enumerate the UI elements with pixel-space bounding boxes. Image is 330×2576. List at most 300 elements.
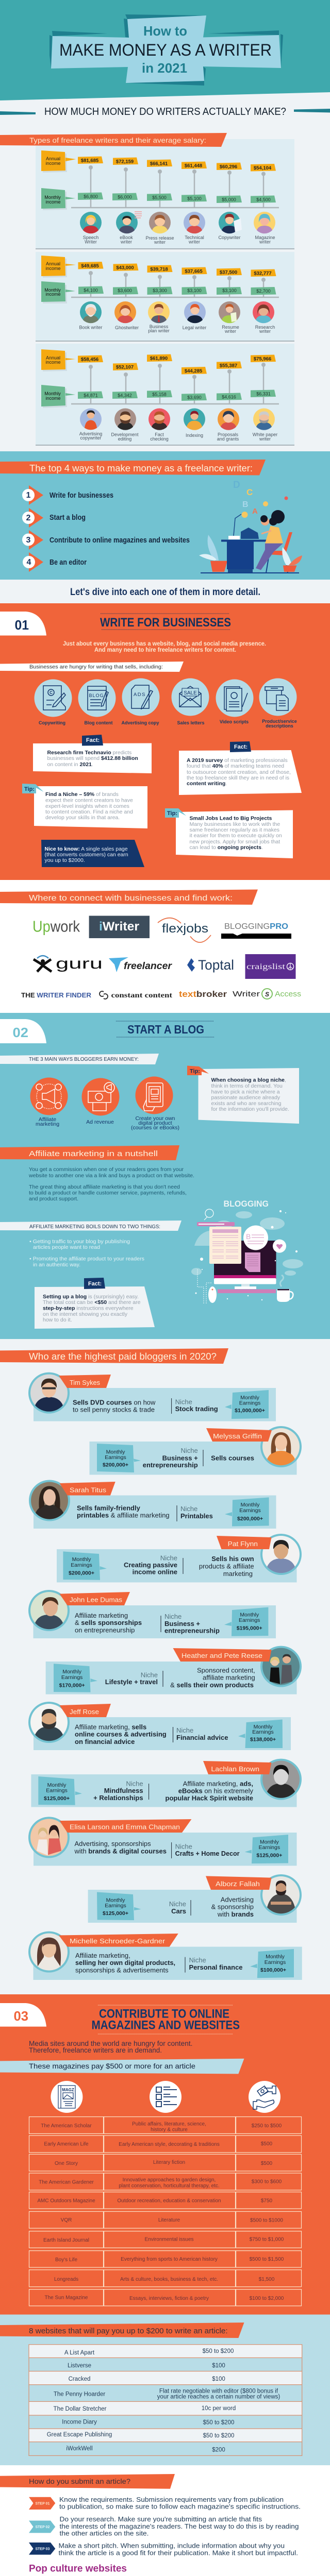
blogger card: Melyssa Griffin: Earnings xyxy=(105,1454,126,1461)
table: websites: iWorkWell xyxy=(66,2446,93,2452)
tip: blog niche: think in terms of demand. You xyxy=(211,1083,283,1089)
writer names row 1: eBook xyxy=(120,235,133,240)
step 1: to publication, so make sure to follow each magazine's specific instructions. xyxy=(59,2503,301,2511)
blogger card: John Lee Dumas: Earnings xyxy=(239,1617,260,1623)
table: magazines xyxy=(29,2117,301,2306)
ribbon: businesses are hungry xyxy=(0,662,184,672)
blogger card: Pat Flynn: products & affiliate xyxy=(199,1563,254,1570)
blogger card: Tim Sykes: Niche xyxy=(175,1398,192,1406)
monthly income key: Monthly xyxy=(44,391,61,396)
blogger card: Michelle Schroeder-Gardner: Monthly xyxy=(266,1954,285,1960)
tip 2: it easier for them to execute quickly on xyxy=(190,833,282,839)
text: affiliate explanation: You get a commission when one of your readers goes from your xyxy=(29,1166,184,1173)
annual income key: income xyxy=(45,360,61,365)
logo: textbroker: textbroker xyxy=(179,989,227,999)
text: affiliate explanation: website to another one via a link and buys a product on that website. xyxy=(28,1173,194,1179)
writer names row 3: copywriter xyxy=(80,435,102,440)
table: magazines: VQR xyxy=(61,2217,72,2223)
blogger card: Alborz Fallah: $125,000+ xyxy=(103,1910,128,1917)
icon: product descriptions xyxy=(259,678,297,716)
writer names row 1: writer xyxy=(154,240,166,245)
logo: constant content xyxy=(100,991,172,999)
icon labels: Sales letters xyxy=(177,720,205,725)
table: websites: A List Apart xyxy=(64,2350,95,2356)
way 3: 3 xyxy=(26,536,31,545)
chart: salaries row 1: $81,685 xyxy=(81,158,99,164)
illustration: woman writing at desk xyxy=(199,480,302,573)
logo: craigslist xyxy=(245,954,296,979)
writer names row 3: Advertising xyxy=(79,431,102,436)
fact 2: the top freelance skill they are in need of is xyxy=(187,775,289,781)
blogger card: Lachlan Brown: $125,000+ xyxy=(44,1795,70,1802)
annual income key: Annual xyxy=(46,261,60,266)
chart: salaries row 1: $60,296 xyxy=(220,164,237,170)
blogger card: Tim Sykes: to sell penny stocks & trade xyxy=(73,1406,155,1414)
logo: writeraccess: S xyxy=(265,991,269,998)
chart: salaries row 1: $5,000 xyxy=(222,197,236,202)
monthly income key xyxy=(41,188,75,210)
blogger card: Heather and Pete Reese: & sells their own products xyxy=(170,1681,254,1689)
blogger card: Lachlan Brown: Earnings xyxy=(46,1788,68,1794)
blogger card: Lachlan Brown: Mindfulness xyxy=(104,1787,143,1794)
blogger card: Elisa Larson and Emma Chapman: Advertising, sponsorships xyxy=(74,1840,151,1848)
icon: digital product xyxy=(135,1077,173,1114)
blogger card: Michelle Schroeder-Gardner: Personal finance xyxy=(189,1963,243,1971)
blogger card: Pat Flynn xyxy=(57,1534,302,1582)
icon: payment hands xyxy=(249,2081,280,2113)
intro text xyxy=(29,2040,193,2054)
blogger card: Pat Flynn: Creating passive xyxy=(124,1561,177,1569)
writer names row 1: writer xyxy=(259,239,271,244)
table: websites: Great Escape Publishing xyxy=(47,2432,112,2438)
way 4: 4 xyxy=(27,558,31,567)
writer names row 3: checking xyxy=(150,436,169,442)
blogger card: Elisa Larson and Emma Chapman: Earnings xyxy=(259,1844,280,1851)
writer names row 3: Development xyxy=(111,432,139,437)
table: magazines: $500 xyxy=(261,2141,273,2147)
blogger card: John Lee Dumas: Affiliate marketing xyxy=(75,1612,128,1619)
ribbon: two things xyxy=(0,1221,182,1231)
tip: blog niche: have to pick a niche where a xyxy=(211,1089,280,1095)
table: magazines: Early American Life xyxy=(44,2142,89,2147)
icon: magazine xyxy=(51,2081,82,2113)
nice to know xyxy=(41,840,144,867)
way 4: Be an editor xyxy=(50,558,87,567)
table: websites: $50 to $200 xyxy=(203,2433,234,2439)
panel: top 4 ways xyxy=(0,451,330,580)
monthly income key: Monthly xyxy=(44,195,61,200)
way 3: Contribute to online magazines and websites xyxy=(50,536,190,545)
chart: salaries row 3: $61,890 xyxy=(150,355,168,362)
annual income key: income xyxy=(45,266,61,271)
writer names row 2: Ghostwriter xyxy=(115,325,139,330)
blogger card: Jeff Rose: on financial advice xyxy=(75,1738,135,1745)
ribbon: how do you submit xyxy=(0,2474,175,2489)
tip 2: Small Jobs Lead to Big Projects xyxy=(190,815,272,821)
tip 2: Many businesses like to work with the xyxy=(190,821,280,827)
text: affiliate explanation: and product support. xyxy=(29,1196,78,1202)
ribbon: 3 main ways: THE 3 MAIN WAYS BLOGGERS EARN MONEY: xyxy=(29,1057,139,1062)
chart: salaries row 1: $4,500 xyxy=(256,197,271,202)
tip 2: same freelancer regularly as it makes xyxy=(190,827,279,833)
blogger card: Heather and Pete Reese: Earnings xyxy=(61,1674,82,1681)
fact 1 xyxy=(33,735,152,773)
tip: blog niche: passionate audience already xyxy=(211,1095,280,1101)
blogger card: Pat Flynn: Sells his own xyxy=(211,1555,254,1563)
tip: blog niche: Tip: xyxy=(190,1069,200,1075)
step 3: Make a short pitch. When submitting, include information about why you xyxy=(59,2541,285,2549)
writer names row 3: and grants xyxy=(217,436,239,442)
blogger card: Tim Sykes: Monthly xyxy=(240,1395,260,1401)
blogger card: Melyssa Griffin: Business + xyxy=(162,1454,198,1462)
logo: writeraccess: Access xyxy=(275,990,301,998)
icon: advertising copy xyxy=(122,678,160,716)
blogger card: Michelle Schroeder-Gardner: $100,000+ xyxy=(260,1967,286,1973)
table: magazines: Everything from sports to American history xyxy=(121,2257,218,2262)
monthly values xyxy=(78,193,276,203)
logo: iWriter: iWriter xyxy=(99,920,139,934)
tip 1: expect their content creators to have xyxy=(45,798,133,804)
blogger card: Melyssa Griffin: entrepreneurship xyxy=(143,1461,198,1469)
fact 2: Fact: xyxy=(234,744,248,750)
intro text: And many need to hire freelance writers for content. xyxy=(94,647,236,653)
chart: salaries row 1: $54,104 xyxy=(254,165,272,171)
tip: blog niche xyxy=(187,1065,299,1124)
way 4 xyxy=(23,552,87,572)
logo: bloggingpro xyxy=(221,922,291,939)
bullets: articles people want to read xyxy=(33,1244,100,1250)
table: magazines: The American Scholar xyxy=(41,2123,92,2129)
writer names row 3: Proposals xyxy=(218,432,239,437)
blogger card: Lachlan Brown: Lachlan Brown xyxy=(211,1765,259,1773)
table: magazines: $1,500 xyxy=(259,2277,275,2282)
section number 02: 02 xyxy=(12,1025,28,1040)
avatars row 3 xyxy=(80,408,275,430)
heading: contribute: CONTRIBUTE TO ONLINE xyxy=(99,2007,229,2021)
intro text xyxy=(63,641,266,653)
ribbon: top 4 ways xyxy=(0,460,266,475)
table: websites: your article reaches a certain number of views) xyxy=(157,2394,280,2400)
blogger card: Heather and Pete Reese xyxy=(46,1646,302,1694)
chart: salaries row 2: $43,000 xyxy=(116,265,134,271)
heading: pop culture websites: Pop culture websites xyxy=(29,2563,127,2574)
icon labels xyxy=(39,719,297,728)
chart: salaries row 2: $37,500 xyxy=(220,270,237,275)
chart: salaries row 3: $4,342 xyxy=(118,393,132,398)
blogger card: Michelle Schroeder-Gardner: Earnings xyxy=(265,1959,286,1965)
table: websites: $50 to $200 xyxy=(203,2420,234,2426)
blogger card: Alborz Fallah xyxy=(88,1874,302,1923)
ribbon: 8 websites: 8 websites that will pay you up to $200 to write an article: xyxy=(29,2327,228,2335)
ribbon: how do you submit: How do you submit an article? xyxy=(29,2478,130,2485)
blogger card: Tim Sykes: Stock trading xyxy=(175,1405,218,1413)
blogger card: John Lee Dumas: John Lee Dumas xyxy=(70,1596,123,1604)
blogger card: Jeff Rose: online courses & advertising xyxy=(75,1731,167,1738)
fact: setting up a blog: step-by-step instructions everywhere xyxy=(43,1306,134,1312)
icon: sales letters: SALE xyxy=(184,690,197,696)
blogger card: Sarah Titus: Sells family-friendly xyxy=(77,1504,141,1512)
chart: salaries row 2: $39,718 xyxy=(150,267,168,272)
writer names row 3: writer xyxy=(259,436,271,442)
monthly income key xyxy=(41,281,75,303)
chart: salaries row 3: $75,966 xyxy=(254,357,271,362)
blogger card: Elisa Larson and Emma Chapman xyxy=(28,1817,297,1866)
tip 2: new projects. Apply for small jobs that xyxy=(190,839,280,845)
blogger card: Heather and Pete Reese: Lifestyle + travel xyxy=(105,1678,158,1686)
table: magazines: history & culture xyxy=(151,2127,188,2132)
blogger card: Pat Flynn: Earnings xyxy=(71,1562,92,1568)
blogger card: Lachlan Brown: Monthly xyxy=(47,1782,67,1788)
blogger card: Elisa Larson and Emma Chapman: Elisa Larson and Emma Chapman xyxy=(70,1823,180,1831)
step 3 xyxy=(29,2541,298,2556)
logo: writeraccess xyxy=(233,989,301,999)
heading: contribute xyxy=(92,2005,240,2034)
annual income key: Annual xyxy=(46,156,60,161)
annual income key: Annual xyxy=(46,355,60,361)
title: How to xyxy=(143,23,187,39)
icon: advertising copy: ADS xyxy=(134,692,146,698)
annual values xyxy=(78,262,276,277)
title xyxy=(59,23,272,76)
chart: salaries row 3: $5,158 xyxy=(152,392,167,397)
logo: craigslist: craigslist xyxy=(246,962,286,971)
chart: salaries row 2: $4,100 xyxy=(84,287,98,293)
fact: setting up a blog: The total cost can be <$50 and there are xyxy=(43,1299,141,1306)
logo: guru: guru xyxy=(56,955,103,972)
chart: salaries row 1: $5,500 xyxy=(152,195,167,200)
section number 03 xyxy=(0,2003,46,2027)
tip: blog niche: exists and who are searching xyxy=(211,1100,282,1107)
ribbon: highest paid bloggers xyxy=(0,1348,228,1364)
blogger card: Alborz Fallah: & sponsorship xyxy=(211,1903,254,1911)
table: magazines: plant conservation, horticultural therapy, etc. xyxy=(119,2183,220,2189)
icon: blog content: BLOG xyxy=(89,693,104,698)
icon labels: Ad revenue xyxy=(86,1119,114,1125)
blogger card: Michelle Schroeder-Gardner: Niche xyxy=(189,1956,206,1964)
blogger card: Lachlan Brown: Niche xyxy=(126,1780,143,1787)
blogger card: Sarah Titus: printables & affiliate marketing xyxy=(77,1512,170,1519)
panel: section 01 write for businesses xyxy=(0,603,330,880)
table: magazines: Boy's Life xyxy=(55,2257,77,2263)
panel: submit and pop culture xyxy=(0,2465,330,2576)
chart: salaries row 2: $3,100 xyxy=(187,288,202,293)
table: websites: $50 to $200 xyxy=(203,2348,234,2354)
fact 1: businesses will spend $412.88 billion xyxy=(47,755,138,761)
monthly income key: Monthly xyxy=(44,287,61,293)
fact 2 xyxy=(179,741,302,795)
step 3: STEP 03 xyxy=(35,2548,50,2551)
intro text: Media sites around the world are hungry for content. xyxy=(29,2040,193,2047)
fact 1: Research firm Technavio predicts xyxy=(47,750,131,756)
chart: salaries row 3: $4,616 xyxy=(222,395,236,400)
icon labels: digital product xyxy=(138,1120,172,1126)
fact: setting up a blog: on the internet showing you exactly xyxy=(43,1311,128,1317)
blogger card: Michelle Schroeder-Gardner: sponsorships & advertisements xyxy=(75,1967,169,1974)
writer names row 1: Speech xyxy=(83,235,98,240)
tip: blog niche: for the information you'll provide. xyxy=(211,1106,289,1112)
blogger card: Jeff Rose: Monthly xyxy=(254,1724,273,1730)
table: websites: $100 xyxy=(212,2376,225,2382)
icon labels xyxy=(36,1115,179,1131)
logo: the writer finder: THE WRITER FINDER xyxy=(21,991,92,999)
ribbon: affiliate marketing: Affiliate marketing in a nutshell xyxy=(29,1149,158,1158)
table: magazines: Longreads xyxy=(54,2277,78,2282)
icon labels: Product/service xyxy=(262,719,297,724)
logo: bloggingpro: BLOGGINGPRO xyxy=(224,922,288,931)
intro text: Just about every business has a website, blog, and social media presence. xyxy=(63,641,266,647)
blogger card: Sarah Titus: $200,000+ xyxy=(237,1516,263,1522)
logo: toptal: Toptal xyxy=(198,957,234,973)
blogger card: Melyssa Griffin: Monthly xyxy=(106,1449,125,1455)
table: magazines: Innovative approaches to garden design, xyxy=(123,2177,216,2183)
annual income key xyxy=(41,256,76,278)
writer names row 3: editing xyxy=(118,436,131,442)
monthly income key xyxy=(41,385,75,408)
blogger card: Lachlan Brown xyxy=(31,1759,302,1807)
fact 2: to outsource content creation, and of those, xyxy=(187,769,291,775)
step 2: STEP 02 xyxy=(35,2526,50,2529)
chart: salaries row 1: $61,448 xyxy=(185,163,202,169)
bullets: • Getting traffic to your blog by publishing xyxy=(29,1239,130,1245)
blogger card: Alborz Fallah: Niche xyxy=(169,1900,186,1908)
table: magazines: Outdoor recreation, education & conservation xyxy=(117,2198,221,2204)
chart: salaries row 3: $58,456 xyxy=(81,357,98,363)
step 1: STEP 01 xyxy=(35,2502,50,2505)
blogger card: Lachlan Brown: Affiliate marketing, ads, xyxy=(183,1780,253,1787)
text: affiliate explanation xyxy=(28,1166,194,1202)
ribbon: types of freelance writers: Types of freelance writers and their average salary: xyxy=(29,136,206,144)
fact: setting up a blog xyxy=(35,1278,155,1329)
blogger card: Pat Flynn: Monthly xyxy=(72,1556,91,1563)
tip 2 xyxy=(165,808,293,858)
fact: setting up a blog: how to do it. xyxy=(43,1317,72,1323)
ribbon: types of freelance writers xyxy=(0,133,227,147)
table: websites: $100 xyxy=(212,2363,225,2369)
chart: salaries row 3: $6,331 xyxy=(256,392,271,397)
tip 2: Tip: xyxy=(167,810,177,817)
table: websites: Listverse xyxy=(68,2363,91,2369)
blogger card: Melyssa Griffin: Niche xyxy=(180,1447,198,1454)
text: affiliate explanation: The great thing about affiliate marketing is that you don't need xyxy=(29,1184,180,1190)
intro text: Therefore, freelance writers are in demand. xyxy=(29,2046,162,2054)
writer names row 2: plan writer xyxy=(148,328,170,333)
chart: salaries row 3: $44,285 xyxy=(185,368,203,374)
annual values xyxy=(78,354,276,374)
illustration: blogging: BLOGGING xyxy=(224,1199,269,1209)
chart: salaries row 2: $2,700 xyxy=(256,289,271,294)
icon: copywriting: C xyxy=(50,690,53,695)
blogger card: Alborz Fallah: Cars xyxy=(171,1907,186,1915)
chart: salaries row 1: $72,159 xyxy=(116,159,134,165)
panel: salary chart backgrounds xyxy=(36,139,294,446)
blogger card: John Lee Dumas: & sells sponsorships xyxy=(75,1619,142,1626)
illustration: woman writing at desk: C xyxy=(246,487,253,497)
blogger card: John Lee Dumas: Business + xyxy=(164,1620,200,1628)
ribbon: affiliate marketing xyxy=(0,1145,179,1160)
blogger card: Pat Flynn: Niche xyxy=(160,1554,177,1562)
title: MAKE MONEY AS A WRITER xyxy=(59,41,272,59)
blogger card: Jeff Rose: Niche xyxy=(176,1726,193,1734)
blogger card: Heather and Pete Reese: Heather and Pete Reese xyxy=(182,1652,262,1659)
table: magazines: $750 to $1,000 xyxy=(250,2237,284,2242)
step 3: think the article is a good fit for their publication. Make it short but impactful. xyxy=(59,2549,298,2556)
table: magazines: $750 xyxy=(261,2198,273,2204)
tip 1: expert-level insights when it comes xyxy=(45,803,129,809)
way 2: Start a blog xyxy=(50,514,86,522)
logo: guru xyxy=(34,955,103,972)
monthly income key: income xyxy=(45,292,61,297)
blogger card: John Lee Dumas: Niche xyxy=(164,1613,182,1620)
logo: flexjobs: flexjobs xyxy=(162,922,208,936)
blogger card: Michelle Schroeder-Gardner: Michelle Schroeder-Gardner xyxy=(70,1937,166,1945)
illustration: woman writing at desk: A xyxy=(252,507,258,516)
blogger card: Sarah Titus: Monthly xyxy=(241,1502,260,1508)
tip 1: Find a Niche – 59% of brands xyxy=(45,791,119,798)
tip 1: Tip: xyxy=(24,786,35,792)
logo: freelancer xyxy=(109,957,173,972)
table: magazines: The Sun Magazine xyxy=(45,2295,88,2301)
nice to know: you up to $2000. xyxy=(44,857,85,863)
writer names row 1: Writer xyxy=(85,239,97,244)
logo: flexjobs xyxy=(158,918,211,942)
heading: contribute: MAGAZINES AND WEBSITES xyxy=(92,2019,240,2032)
tip: blog niche: When choosing a blog niche, xyxy=(211,1077,286,1083)
blogger card: Melyssa Griffin xyxy=(90,1426,302,1475)
way 3 xyxy=(22,530,190,550)
avatars row 1 xyxy=(80,212,275,233)
annual values xyxy=(78,157,276,171)
icon: copywriting xyxy=(34,679,72,717)
blogger card: Tim Sykes: Sells DVD courses on how xyxy=(73,1398,156,1406)
blogger card: Elisa Larson and Emma Chapman: Crafts + Home Decor xyxy=(175,1850,240,1857)
monthly values xyxy=(78,389,276,401)
blogger card: Tim Sykes: Earnings xyxy=(239,1400,260,1406)
illustration: woman writing at desk: B xyxy=(242,500,249,509)
ribbon: where to connect: Where to connect with businesses and find work: xyxy=(29,894,233,903)
blogger card: Pat Flynn: income online xyxy=(133,1568,177,1575)
blogger card: Heather and Pete Reese: affiliate marketing xyxy=(203,1674,255,1682)
icon labels: descriptions xyxy=(266,723,293,728)
step 2: the interests of the magazine's readers. The best way to do this is by reading xyxy=(60,2522,299,2530)
ribbon: magazines pay $500: These magazines pay $500 or more for an article xyxy=(29,2062,195,2070)
table: websites: The Penny Hoarder xyxy=(54,2391,105,2397)
blogger card: Jeff Rose: Financial advice xyxy=(176,1734,228,1741)
section number 03: 03 xyxy=(13,2008,28,2024)
chart: salaries row 3 xyxy=(41,349,279,442)
blogger card: Pat Flynn: Pat Flynn xyxy=(228,1540,258,1548)
table: websites: Flat rate negotiable with editor ($800 bonus if xyxy=(159,2388,278,2394)
fact 1: Fact: xyxy=(86,737,100,743)
blogger card: Alborz Fallah: Alborz Fallah xyxy=(216,1880,260,1888)
blogger card: Jeff Rose: Jeff Rose xyxy=(70,1708,99,1716)
writer names row 1: Press release xyxy=(145,235,174,241)
blogger card: Sarah Titus: Earnings xyxy=(239,1507,261,1514)
tip 1: to content creation. Find a niche and xyxy=(45,809,133,815)
logo: writeraccess: Writer xyxy=(233,990,260,998)
blogger card: Lachlan Brown: popular Hack Spirit website xyxy=(165,1794,253,1802)
writer names row 3: Fact xyxy=(155,432,164,437)
writer names row 2: Resume xyxy=(222,325,239,330)
chart: salaries row 2: $3,600 xyxy=(118,288,132,293)
writer names row 1 xyxy=(83,235,275,245)
step 2: Do your research. Make sure you're submitting an article that fits xyxy=(60,2515,262,2523)
step 2 xyxy=(29,2515,299,2537)
blogger card: Heather and Pete Reese: Niche xyxy=(141,1671,158,1679)
table: websites: The Dollar Stretcher xyxy=(54,2406,107,2412)
table: magazines: Essays, interviews, fiction & poetry xyxy=(129,2296,209,2301)
way 2: 2 xyxy=(26,514,31,522)
blogger card: Jeff Rose: Earnings xyxy=(252,1729,274,1735)
